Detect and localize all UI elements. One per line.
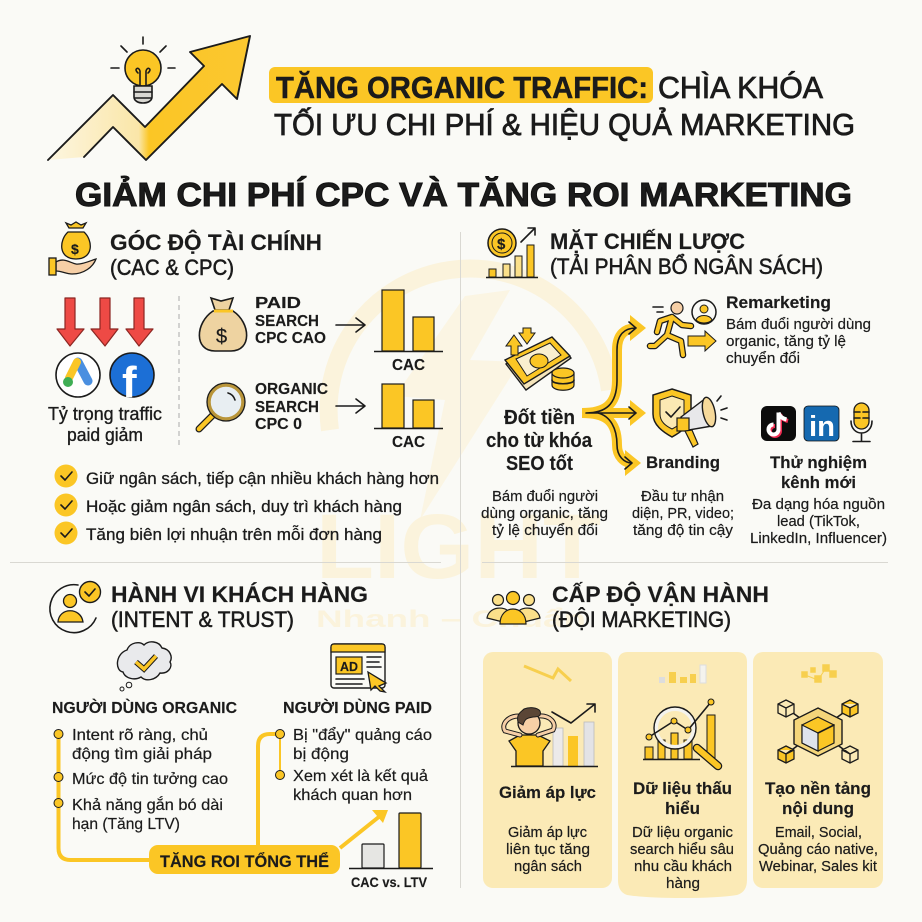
arrow: branching bracket [582,315,646,476]
icon: LinkedIn: in [809,411,835,443]
checklist: Giữ ngân sách, tiếp cận nhiều khách hàng hơn [86,469,439,488]
icon: magnifier with chart [643,699,718,766]
heading: GÓC ĐỘ TÀI CHÍNH [110,230,322,255]
heading: (CAC & CPC) [110,255,234,280]
text: branding: tăng độ tin cậy [633,522,733,539]
text: hiểu [665,799,700,818]
icon: relaxed person with chart [504,704,598,766]
heading: CẤP ĐỘ VẬN HÀNH [552,582,769,607]
text: paid traffic share: paid giảm [67,425,143,445]
mini chart: bars [659,665,706,683]
text: organic users: Mức độ tin tưởng cao [72,771,228,788]
text: paid users: Bị "đẩy" quảng cáo [293,726,432,744]
text: search hiểu sâu [630,841,734,858]
icon: Facebook [110,353,154,407]
text: branding: Branding [646,453,720,472]
text: paid users: Xem xét là kết quả [293,768,428,785]
icon: user with check [50,582,100,633]
text [758,779,878,875]
text: nội dung [782,799,854,818]
text: new channels: Đa dạng hóa nguồn [752,496,885,513]
icon: coin and rising bars [486,228,538,278]
watermark: LIGHT logo: LIGHT [316,496,601,598]
title [269,67,855,142]
text: paid users: bị động [293,746,349,763]
text: new channels: lead (TikTok, [777,513,860,530]
chart: CAC paid: CAC [392,357,425,374]
label: paid search: PAID [255,295,301,312]
icon: content cubes [778,700,858,763]
arrow [336,399,365,413]
text: Email, Social, [775,824,862,841]
arrow [336,318,365,332]
panel: strategy [481,228,887,547]
label: paid search: SEARCH [255,313,319,330]
callout: total ROI [149,845,340,874]
text: burn money on SEO keywords: SEO tốt [506,453,573,475]
title: TĂNG ORGANIC TRAFFIC: [276,70,648,105]
label: paid search [255,295,326,347]
panel: financial angle [48,222,443,544]
icon: Facebook: f [122,358,137,407]
heading: (ĐỘI MARKETING) [552,607,731,632]
title: TỐI ƯU CHI PHÍ & HIỆU QUẢ MARKETING [274,106,855,142]
text: Dữ liệu organic [632,824,733,841]
text: description: dùng organic, tăng [481,505,608,522]
label: organic search: ORGANIC [255,381,328,398]
text: liên tục tăng [506,841,590,858]
heading [552,582,769,632]
text: burn money on SEO keywords: cho từ khóa [486,430,593,452]
text: burn money on SEO keywords: Đốt tiền [504,407,575,429]
text: organic users: Intent rõ ràng, chủ [72,727,208,744]
text: paid users [258,698,432,845]
mini chart: network [802,665,836,682]
callout: total ROI: TĂNG ROI TỔNG THỂ [160,852,329,871]
icon: shield and megaphone [653,389,727,447]
text [499,783,596,875]
heading: MẶT CHIẾN LƯỢC [550,229,745,254]
icon: paid money bag [199,298,247,351]
heading: (TẢI PHÂN BỔ NGÂN SÁCH) [550,254,823,279]
text: description [481,488,608,539]
text: description: tỷ lệ chuyển đổi [492,522,598,539]
text: Giảm áp lực [499,783,596,802]
icon: team [487,592,540,624]
icon: paid money bag: $ [216,326,227,348]
icon: LinkedIn [804,406,839,443]
panel: customer behaviour [50,582,433,890]
text: burn money on SEO keywords [486,407,593,475]
chart: CAC vs LTV: CAC vs. LTV [351,875,427,890]
text: Webinar, Sales kit [759,858,878,875]
checklist: Tăng biên lợi nhuận trên mỗi đơn hàng [86,525,382,544]
text: Giảm áp lực [508,824,587,841]
card: content foundation [753,652,883,888]
icon: ad window: AD [340,659,358,674]
text: organic users: hạn (Tăng LTV) [72,816,180,833]
card: data insight [618,652,747,898]
text: branding: Đầu tư nhận [641,488,724,505]
text: branding: diện, PR, video; [632,505,734,522]
text: paid users: NGƯỜI DÙNG PAID [283,698,432,717]
text: paid users: khách quan hơn [293,787,412,804]
icon: money bag on hand: $ [71,241,79,257]
text: description: Bám đuổi người [492,488,598,505]
text: organic users: Khả năng gắn bó dài [72,795,223,814]
text: hàng [666,875,700,892]
section dividers [10,232,888,888]
text: new channels: kênh mới [781,473,856,492]
text: branding [632,453,734,539]
text: new channels [750,453,887,547]
heading [111,582,368,632]
label: paid search: CPC CAO [255,330,326,347]
text: remarketing: Bám đuổi người dùng [726,316,871,333]
text: nhu cầu khách [634,858,732,875]
icon: coin and rising bars: $ [497,236,506,253]
icon: Google Ads [56,353,100,397]
icon: ad window [331,644,386,692]
label: organic search [255,381,328,433]
mini chart: falling [524,666,571,681]
icon: TikTok [761,406,796,441]
text: remarketing [726,293,871,367]
text: new channels: Thử nghiệm [770,453,867,472]
icon: money stack [505,328,574,390]
checklist [54,464,439,544]
text: ngân sách [514,858,582,875]
card: reduce pressure [483,652,612,888]
text: Quảng cáo native, [758,841,878,858]
text: paid traffic share: Tỷ trọng traffic [48,404,162,424]
heading: HÀNH VI KHÁCH HÀNG [111,582,368,607]
watermark: LIGHT logo [316,269,610,633]
chart: CAC organic: CAC [392,434,425,451]
text: new channels: LinkedIn, Influencer) [750,530,887,547]
text: remarketing: Remarketing [726,293,831,312]
heading [110,230,322,280]
icon: money bag on hand [49,222,96,275]
text: organic users: động tìm giải pháp [72,746,212,763]
text [630,779,734,892]
panel: operations [483,582,883,898]
chart: CAC paid [374,290,443,374]
icon: red down arrows [57,298,153,346]
icon: thought cloud [117,642,171,691]
text: Dữ liệu thấu [633,779,732,798]
chart: CAC organic [374,384,443,451]
label: organic search: SEARCH [255,399,319,416]
watermark: LIGHT logo: Nhanh – Chuẩn [316,606,586,633]
text: Tạo nền tảng [765,779,871,798]
icon: growth arrow with light bulb [48,36,250,160]
text: remarketing: organic, tăng tỷ lệ [726,333,846,350]
title: CHÌA KHÓA [658,70,823,105]
heading: (INTENT & TRUST) [111,607,294,632]
text: organic users [52,698,237,860]
checklist: Hoặc giảm ngân sách, duy trì khách hàng [86,497,402,516]
subtitle: GIẢM CHI PHÍ CPC VÀ TĂNG ROI MARKETING [75,176,852,213]
icon: magnifier [199,383,245,429]
arrow: rising [340,810,388,848]
text: paid traffic share [48,404,162,445]
label: organic search: CPC 0 [255,416,302,433]
text: organic users: NGƯỜI DÙNG ORGANIC [52,698,237,717]
text: remarketing: chuyển đổi [726,350,800,367]
icon: runner remarketing [650,300,716,355]
heading [550,229,823,279]
chart: CAC vs LTV [349,813,433,890]
icon: microphone [851,403,872,442]
